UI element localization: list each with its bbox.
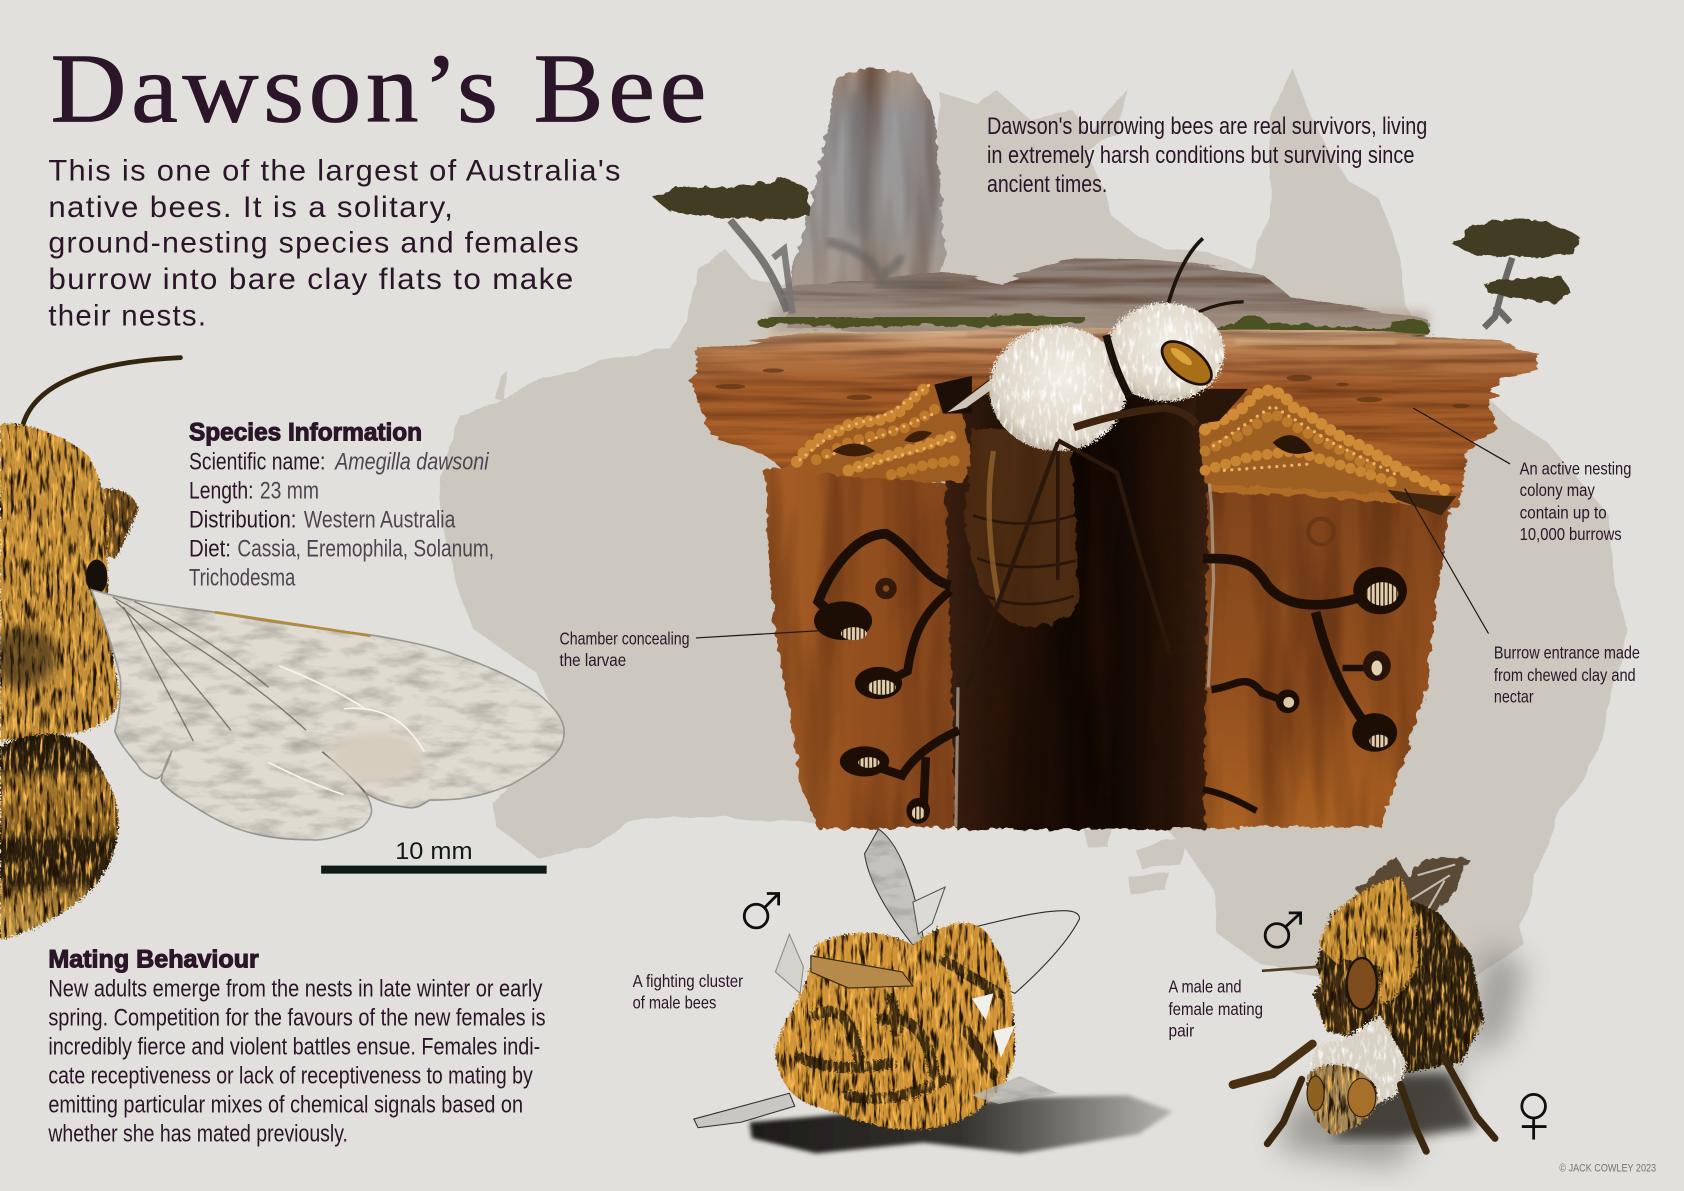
mesa shadow column (846, 91, 873, 236)
landscape: rock mesa and distant ridge (763, 68, 1429, 343)
callout: nesting colony: colony may (1520, 480, 1595, 500)
neck band (1106, 335, 1130, 397)
caption: mating pair: A male and (1168, 976, 1242, 996)
mating behaviour: emitting particular mixes of chemical signals based on (48, 1093, 523, 1119)
mating behaviour: New adults emerge from the nests in late winter or early (48, 977, 543, 1003)
callout: burrow entrance: Burrow entrance made (1494, 642, 1640, 662)
distant ridge (784, 258, 1428, 335)
mating behaviour: cate receptiveness or lack of receptiveness to mating by (48, 1064, 533, 1090)
copyright: © JACK COWLEY 2023 (1559, 1163, 1656, 1175)
tunnels and chambers, left (814, 534, 959, 824)
left soil block (765, 464, 961, 829)
mating behaviour: whether she has mated previously. (48, 1122, 348, 1148)
icon: male symbol, pair (1265, 913, 1301, 947)
intro paragraph: This is one of the largest of Australia's (48, 154, 622, 187)
right soil block (1201, 483, 1450, 827)
antennae (1168, 238, 1203, 303)
top wing (865, 829, 924, 945)
burrow entrance hole (934, 376, 972, 413)
mating behaviour: incredibly fierce and violent battles ensue. Females indi- (48, 1035, 540, 1061)
far-left wing (775, 934, 803, 993)
species information: Length: (189, 478, 253, 504)
mating heading: Mating Behaviour (48, 947, 259, 974)
female white body (1305, 1015, 1407, 1117)
dark bands (800, 961, 999, 1098)
illustration: fighting cluster of male bees (694, 829, 1173, 1153)
icon: male symbol, cluster (744, 894, 779, 928)
caption: mating pair: female mating (1168, 999, 1263, 1019)
thorax fur (989, 326, 1127, 451)
male body (1316, 886, 1484, 1074)
soil band under right mound (1203, 470, 1450, 507)
male antenna (1262, 967, 1321, 971)
caption: fighting cluster (633, 971, 743, 1012)
abdomen (0, 734, 118, 940)
callout: nesting colony: 10,000 burrows (1520, 524, 1622, 544)
rock mesa (784, 68, 945, 295)
species information: Distribution: (189, 507, 296, 533)
species information: 23 mm (260, 478, 319, 504)
callout: burrow entrance: from chewed clay and (1494, 665, 1636, 685)
intro paragraph: their nests. (48, 299, 207, 332)
species information: Amegilla dawsoni (333, 449, 489, 475)
caption: mating pair: pair (1168, 1020, 1195, 1040)
soil pebbles (715, 368, 1469, 408)
callout: nesting colony (1413, 408, 1631, 544)
intro paragraph: burrow into bare clay flats to make (48, 263, 575, 296)
male wing over body (811, 956, 913, 988)
tree: left acacia (654, 177, 809, 314)
caption: fighting cluster: of male bees (633, 992, 716, 1012)
ground surface (693, 329, 1538, 507)
title: Dawson’s Bee (50, 34, 711, 143)
male head with eye (1312, 959, 1380, 1036)
scale bar (321, 839, 547, 874)
green scrub band (763, 318, 1396, 333)
wing folded (945, 357, 1020, 413)
callout: larvae chamber (560, 628, 825, 670)
male wings (1355, 857, 1469, 934)
callout: nesting colony: contain up to (1520, 503, 1607, 523)
soft shadow (1278, 945, 1525, 1165)
right wing (967, 911, 1079, 993)
illustration: male and female mating pair (1233, 857, 1525, 1165)
mating behaviour (48, 947, 546, 1148)
survivors text: Dawson's burrowing bees are real survivors, living (987, 114, 1427, 140)
lower left wing (694, 1093, 795, 1128)
intro paragraph: ground-nesting species and females (48, 226, 580, 259)
scale bar: 10 mm (395, 839, 473, 865)
species heading: Species Information (189, 419, 422, 446)
legs (1074, 408, 1196, 427)
large bee detail, left edge (0, 358, 180, 940)
eye (1155, 333, 1219, 393)
tree: right acacia (1453, 219, 1579, 328)
caption: mating pair (1168, 976, 1263, 1040)
legs (1233, 1044, 1312, 1085)
species information: Scientific name: (189, 449, 325, 475)
right mound (1194, 388, 1456, 515)
survivors text (987, 114, 1427, 198)
small wing (913, 887, 945, 934)
foreground haze band (773, 304, 1428, 335)
thorax (0, 424, 118, 741)
species information (189, 419, 494, 591)
central bee emerging from burrow (945, 238, 1244, 687)
sand highlights (768, 333, 1396, 344)
female head (1307, 1065, 1377, 1135)
large bee wing (91, 590, 564, 840)
intro paragraph: native bees. It is a solitary, (48, 191, 454, 224)
species information: Diet: (189, 536, 231, 562)
species information: Western Australia (304, 507, 456, 533)
rock debris (827, 242, 945, 285)
survivors text: ancient times. (987, 172, 1107, 198)
burrow cross-section (693, 329, 1538, 829)
grey wing lower right (972, 1076, 1058, 1104)
dark eye spot (86, 560, 107, 594)
central shaft (943, 392, 1208, 829)
cast shadow (750, 1095, 1173, 1153)
mating behaviour: spring. Competition for the favours of the new females is (48, 1006, 546, 1032)
head bump (91, 488, 139, 558)
callout: nesting colony: An active nesting (1520, 459, 1631, 479)
callout: larvae chamber: the larvae (560, 650, 626, 670)
icon: female symbol (1522, 1094, 1547, 1139)
antenna (21, 358, 180, 432)
intro paragraph (48, 154, 622, 332)
callout: burrow entrance (1405, 489, 1640, 706)
caption: fighting cluster: A fighting cluster (633, 971, 743, 991)
abdomen (964, 429, 1079, 627)
cluster body (775, 923, 1015, 1130)
species information: Trichodesma (189, 565, 296, 591)
head fur (1106, 303, 1224, 402)
callout: larvae chamber: Chamber concealing (560, 628, 689, 648)
map of Australia (440, 69, 1626, 1010)
survivors text: in extremely harsh conditions but surviving since (987, 143, 1414, 169)
white patches (972, 993, 1015, 1058)
species information: Cassia, Eremophila, Solanum, (237, 536, 494, 562)
tunnels and chambers, right (1203, 519, 1407, 811)
shaft edge highlights (956, 424, 1214, 827)
left mound (789, 376, 972, 483)
callout: burrow entrance: nectar (1494, 686, 1534, 706)
